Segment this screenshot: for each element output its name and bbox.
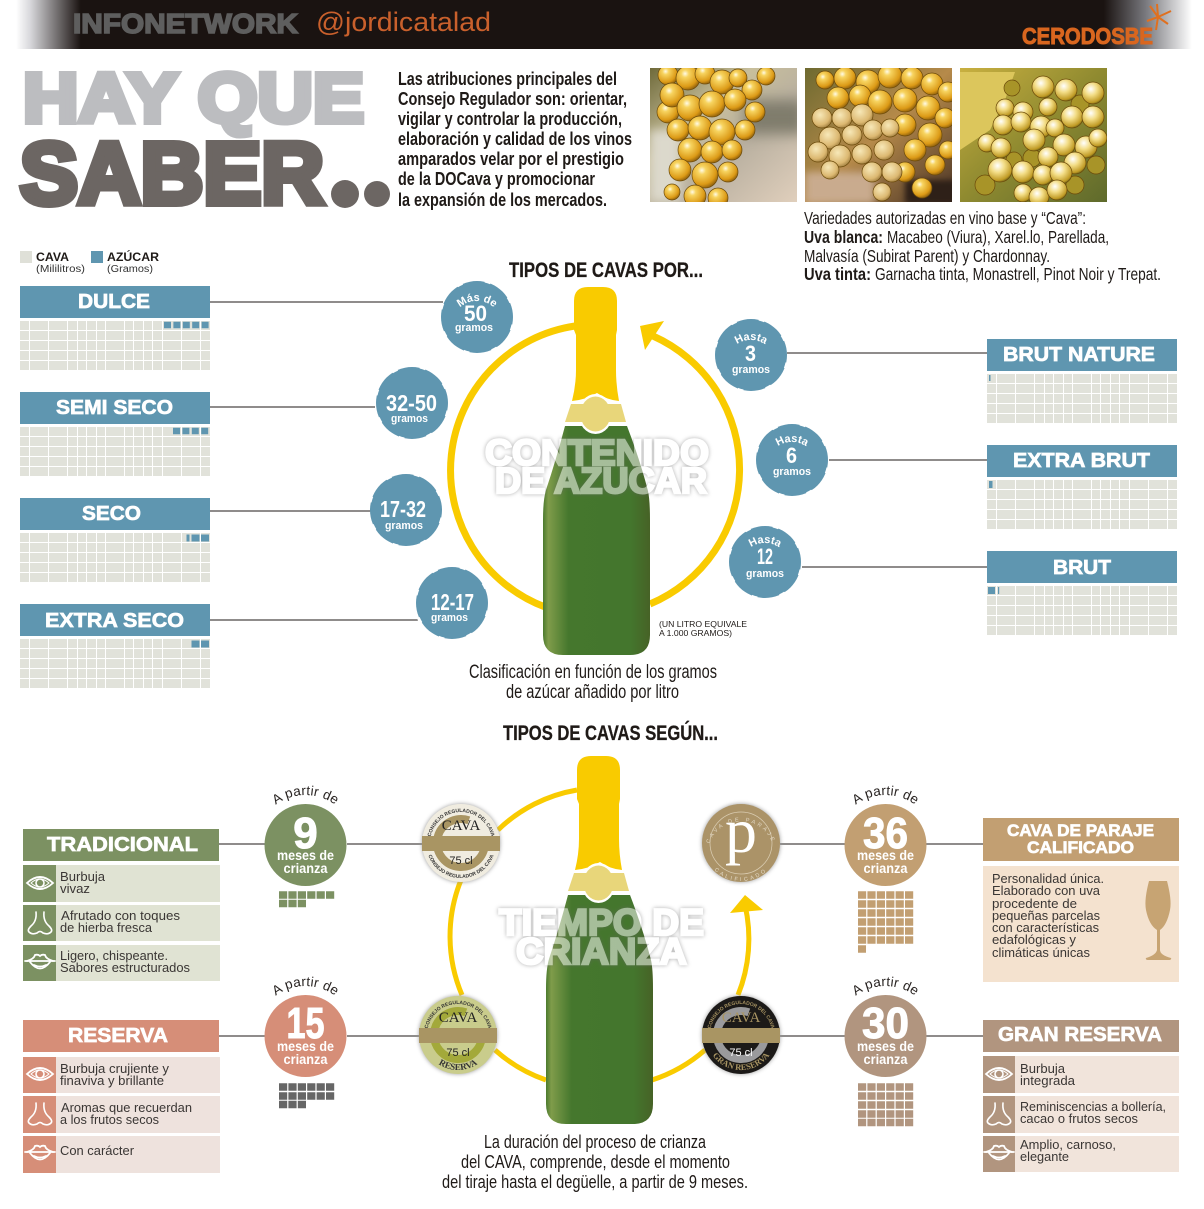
- panel: cava de paraje calificado: CAVA DE PARAJE: [1007, 821, 1154, 840]
- panel: brut nature: [987, 339, 1177, 423]
- bottle: ageing: [546, 756, 653, 1124]
- cap: 32-50: 32-50: [386, 390, 437, 416]
- note: litre equivalence: A 1.000 GRAMOS): [659, 628, 732, 638]
- months squares: [858, 1087, 914, 1122]
- seal: tradicional: [419, 801, 503, 885]
- panel: tradicional: [23, 829, 220, 981]
- note: litre equivalence: [659, 619, 747, 638]
- months squares: [858, 895, 914, 949]
- seal: reserva: [416, 992, 500, 1077]
- cap: hasta 12: 12: [757, 544, 773, 569]
- cap: 12-17: [408, 559, 496, 647]
- panel: gran reserva: [983, 1020, 1179, 1172]
- row: burbuja: vivaz: [60, 881, 90, 896]
- bottle label: contenido de azucar: CONTENIDO: [485, 432, 709, 473]
- panel: extra brut: EXTRA BRUT: [1013, 450, 1150, 472]
- panel: dulce: DULCE: [78, 291, 150, 313]
- badge: 15 meses: meses de: [277, 1039, 334, 1054]
- heading: tipos de cavas segun: TIPOS DE CAVAS SEGÚN...: [503, 721, 718, 745]
- row: aroma: [23, 905, 220, 941]
- sugar classification caption: de azúcar añadido por litro: [506, 682, 679, 703]
- bottle label: tiempo de crianza: [499, 902, 704, 972]
- panel: cava de paraje calificado: [983, 818, 1179, 982]
- seal: gran reserva: [699, 992, 783, 1077]
- photo: grapes 1: [650, 68, 797, 202]
- row: burbuja: integrada: [1020, 1073, 1076, 1088]
- badge: 30 meses: A partir de: [854, 976, 918, 996]
- panel: brut: [987, 551, 1177, 635]
- badge: 15 meses: crianza: [284, 1052, 328, 1067]
- cap: hasta 6: gramos: [773, 466, 811, 478]
- photo: grapes 2: [805, 64, 958, 204]
- ageing caption: del CAVA, comprende, desde el momento: [461, 1151, 730, 1172]
- cap: 12-17: gramos: [431, 612, 468, 624]
- row: aroma: Aromas que recuerdan: [61, 1100, 192, 1115]
- row: burbuja: [983, 1056, 1179, 1093]
- bottle label: tiempo de crianza: TIEMPO DE: [499, 902, 704, 943]
- intro text: amparados velar por el prestigio: [398, 148, 624, 169]
- badge: 9 meses: [264, 786, 346, 908]
- panel: extra seco: [20, 604, 210, 688]
- row: aroma: Reminiscencias a bollería,: [1020, 1099, 1166, 1114]
- panel: brut nature: BRUT NATURE: [1003, 344, 1155, 366]
- intro text: elaboración y calidad de los vinos: [398, 128, 632, 149]
- badge: 36 meses: crianza: [864, 861, 908, 876]
- grape varieties text: Variedades autorizadas en vino base y “Cava”:: [804, 208, 1086, 228]
- seal: paraje calificado: p: [725, 795, 757, 866]
- intro text: vigilar y controlar la producción,: [398, 108, 622, 129]
- row: aroma: de hierba fresca: [60, 920, 153, 935]
- badge: 9 meses: A partir de: [274, 786, 338, 805]
- row: burbuja: [23, 1057, 220, 1093]
- row: aroma: [983, 1096, 1179, 1133]
- seal: gran reserva: GRAN RESERVA: [714, 1053, 770, 1070]
- heading: tipos de cavas por: TIPOS DE CAVAS POR...: [509, 259, 703, 282]
- bottle: sugar: [543, 287, 650, 655]
- badge: 36 meses: meses de: [857, 848, 914, 863]
- title: SABER: [20, 126, 324, 222]
- cap: hasta 3: 3: [745, 341, 756, 366]
- description: procedente de: [992, 896, 1077, 911]
- cap: mas de 50: Más de: [456, 294, 496, 307]
- badge: 15 meses: A partir de: [274, 976, 338, 996]
- connector lines sugar: [210, 302, 987, 620]
- description: edafológicas y: [992, 932, 1076, 947]
- row: sabor: Con carácter: [60, 1143, 135, 1158]
- sugar ring with arrow: [451, 321, 740, 607]
- badge: 15 meses: 15: [286, 999, 324, 1048]
- intro text: Consejo Regulador son: orientar,: [398, 88, 627, 109]
- cap: hasta 12: [729, 526, 801, 598]
- legend: [20, 251, 160, 275]
- cap: 32-50: [368, 359, 456, 447]
- seal: gran reserva: CAVA: [722, 1010, 760, 1026]
- panel: extra seco: EXTRA SECO: [45, 610, 184, 632]
- panel: reserva: RESERVA: [68, 1025, 168, 1047]
- legend: (Gramos): [107, 264, 153, 275]
- photo: grapes 3: [960, 68, 1107, 207]
- row: sabor: Sabores estructurados: [60, 960, 190, 975]
- grape varieties text: Malvasía (Subirat Parent) y Chardonnay.: [804, 246, 1050, 266]
- intro text: Las atribuciones principales del: [398, 68, 617, 89]
- cap: 17-32: 17-32: [380, 496, 426, 522]
- seal: reserva: 75 cl: [446, 1047, 470, 1059]
- cap: hasta 6: 6: [786, 443, 797, 468]
- badge: 9 meses: 9: [293, 809, 318, 858]
- cap: hasta 3: [715, 319, 787, 391]
- cap: 32-50: gramos: [391, 413, 428, 425]
- description: [992, 871, 1104, 960]
- row: aroma: cacao o frutos secos: [1020, 1111, 1138, 1126]
- badge: 30 meses: crianza: [864, 1052, 908, 1067]
- badge: 30 meses: 30: [862, 999, 909, 1048]
- description: con características: [992, 920, 1099, 935]
- logo: cerodosbe: [1022, 4, 1171, 49]
- ageing caption: La duración del proceso de crianza: [484, 1131, 707, 1152]
- intro text: la expansión de los mercados.: [398, 189, 607, 210]
- grape varieties text: [804, 208, 1161, 284]
- panel: dulce: [20, 286, 210, 370]
- connector lines ageing: [219, 844, 983, 1036]
- cap: hasta 12: Hasta: [748, 536, 781, 548]
- cap: 17-32: gramos: [385, 520, 423, 532]
- note: litre equivalence: (UN LITRO EQUIVALE: [659, 619, 747, 629]
- row: aroma: a los frutos secos: [60, 1112, 159, 1127]
- panel: tradicional: TRADICIONAL: [47, 834, 198, 856]
- months squares: [279, 1087, 335, 1104]
- legend: CAVA: [36, 252, 69, 264]
- panel: cava de paraje calificado: CALIFICADO: [1027, 838, 1134, 857]
- description: pequeñas parcelas: [992, 908, 1100, 923]
- cap: 17-32: [362, 466, 450, 554]
- cap: mas de 50: 50: [464, 301, 487, 326]
- grape varieties text: Uva tinta:: [804, 264, 871, 284]
- title: HAY QUE: [23, 59, 364, 137]
- badge: 36 meses: A partir de: [854, 786, 918, 805]
- bottle label: contenido de azucar: [485, 432, 709, 501]
- seal: reserva: CONSEJO REGULADOR DEL CAVA: [424, 1000, 492, 1028]
- row: sabor: elegante: [1020, 1149, 1069, 1164]
- row: sabor: [983, 1136, 1179, 1172]
- seal: reserva: RESERVA: [438, 1059, 478, 1070]
- badge: 36 meses: 36: [863, 809, 908, 858]
- badge: 30 meses: meses de: [857, 1039, 914, 1054]
- grape varieties text: Macabeo (Viura), Xarel.lo, Parellada,: [887, 227, 1109, 247]
- brand: infonetwork: INFONETWORK: [73, 8, 298, 39]
- cap: mas de 50: [441, 281, 513, 353]
- ageing caption: del tiraje hasta el degüelle, a partir de 9 meses.: [442, 1171, 748, 1192]
- cap: hasta 6: [756, 424, 828, 496]
- badge: 30 meses: [844, 976, 926, 1126]
- row: aroma: Afrutado con toques: [61, 908, 181, 923]
- sugar classification caption: Clasificación en función de los gramos: [469, 662, 717, 683]
- legend: AZÚCAR: [107, 251, 160, 264]
- seal: tradicional: CONSEJO REGULADOR DEL CAVA: [428, 808, 494, 836]
- row: burbuja: Burbuja: [1020, 1061, 1066, 1076]
- seal: gran reserva: CONSEJO REGULADOR DEL CAVA: [708, 1000, 774, 1028]
- panel: seco: SECO: [82, 503, 141, 525]
- seal: paraje calificado: [699, 795, 783, 885]
- sugar classification caption: [469, 662, 717, 703]
- row: burbuja: Burbuja crujiente y: [60, 1061, 170, 1076]
- row: aroma: [23, 1096, 220, 1133]
- intro text: [398, 68, 632, 210]
- panel: semi seco: [20, 392, 210, 476]
- cap: hasta 6: Hasta: [775, 436, 808, 446]
- header bar: [16, 0, 1192, 49]
- description: Elaborado con uva: [992, 883, 1101, 898]
- panel: brut: BRUT: [1053, 557, 1111, 579]
- panel: seco: [20, 498, 210, 582]
- seal: paraje calificado: CALIFICADO: [715, 868, 765, 881]
- seal: tradicional: CAVA: [442, 818, 480, 834]
- badge: 15 meses: [264, 976, 346, 1108]
- cap: mas de 50: gramos: [455, 322, 493, 334]
- row: sabor: [23, 1136, 220, 1173]
- row: burbuja: Burbuja: [60, 869, 106, 884]
- seal: paraje calificado: CAVA DE PARAJE: [706, 818, 775, 843]
- panel: reserva: [23, 1020, 220, 1173]
- badge: 9 meses: meses de: [277, 848, 334, 863]
- bottle label: contenido de azucar: DE AZUCAR: [495, 460, 707, 501]
- panel: extra brut: [987, 445, 1177, 529]
- icon: wine glass: [1145, 881, 1171, 960]
- cap: hasta 3: gramos: [732, 364, 770, 376]
- seal: gran reserva: 75 cl: [729, 1047, 753, 1059]
- ageing caption: [442, 1131, 748, 1192]
- seal: tradicional: 75 cl: [449, 855, 473, 867]
- badge: 9 meses: crianza: [284, 861, 328, 876]
- ageing ring with arrow: [450, 790, 763, 1080]
- logo: cerodosbe: CERODOSBE: [1022, 23, 1153, 49]
- cap: hasta 3: Hasta: [734, 334, 767, 344]
- intro text: de la DOCava y promocionar: [398, 168, 595, 189]
- seal: tradicional: CONSEJO REGULADOR DEL CAVA: [428, 854, 494, 878]
- panel: semi seco: SEMI SECO: [56, 397, 173, 419]
- title: [20, 59, 390, 222]
- row: burbuja: finaviva y brillante: [60, 1073, 164, 1088]
- cap: hasta 12: gramos: [746, 568, 784, 580]
- bottle label: tiempo de crianza: CRIANZA: [516, 931, 687, 972]
- description: Personalidad única.: [992, 871, 1104, 886]
- badge: 36 meses: [844, 786, 926, 953]
- row: sabor: [23, 945, 220, 981]
- description: climáticas únicas: [992, 945, 1090, 960]
- cap: 12-17: 12-17: [431, 589, 474, 615]
- legend: (Mililitros): [36, 264, 85, 275]
- panel: gran reserva: GRAN RESERVA: [998, 1024, 1162, 1046]
- handle: jordicatalad: @jordicatalad: [316, 7, 491, 37]
- row: sabor: Ligero, chispeante.: [60, 948, 168, 963]
- row: burbuja: [23, 865, 220, 902]
- row: sabor: Amplio, carnoso,: [1020, 1137, 1116, 1152]
- grape varieties text: Uva blanca:: [804, 227, 883, 247]
- seal: reserva: CAVA: [439, 1010, 477, 1026]
- months squares: [279, 895, 335, 904]
